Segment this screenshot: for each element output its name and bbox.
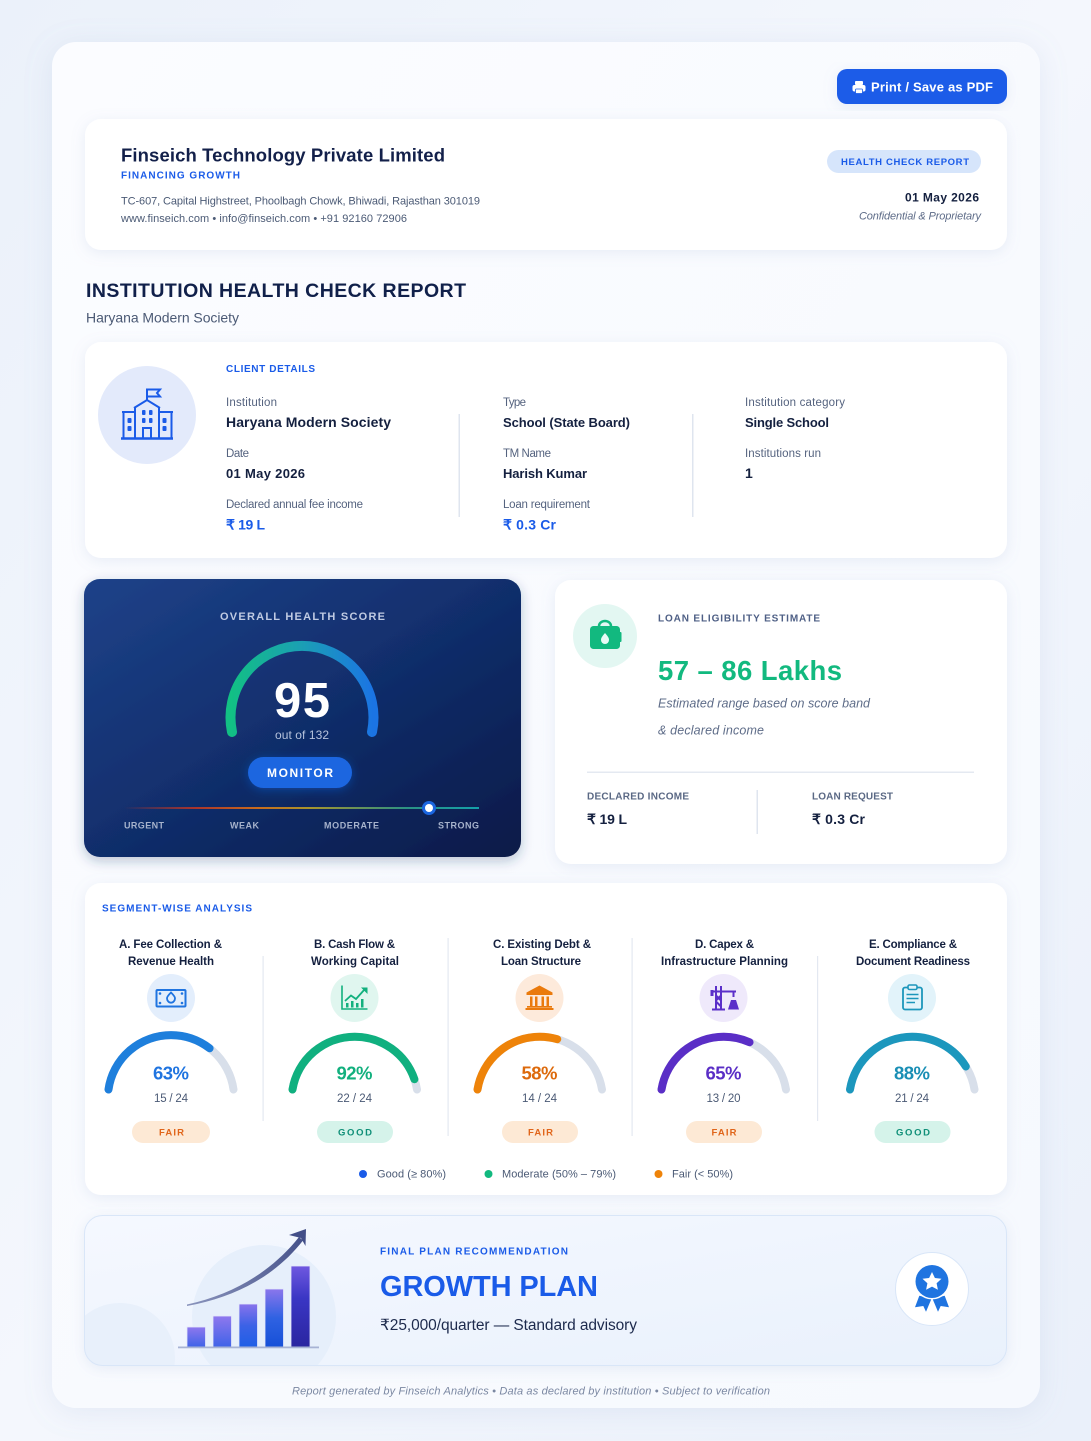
eligibility range: 57 – 86 Lakhs — [658, 655, 842, 686]
field: declared income: Declared annual fee income — [226, 499, 363, 511]
panel: segment-wise analysis — [85, 883, 1007, 1195]
segment B: cash flow: 22 / 24 — [337, 1093, 373, 1105]
field: institutions run: 1 — [745, 465, 753, 481]
segment C: existing debt: Loan Structure — [501, 956, 581, 968]
growth arrow — [187, 1229, 306, 1306]
band labels: STRONG — [438, 820, 479, 830]
field: date: 01 May 2026 — [226, 466, 305, 481]
field: loan requirement: ₹ 0.3 Cr — [503, 516, 557, 532]
segment B: cash flow — [292, 939, 417, 1143]
field: type: School (State Board) — [503, 415, 630, 430]
band labels: WEAK — [230, 820, 260, 830]
report date: 01 May 2026 — [905, 190, 979, 204]
status pill: good: GOOD — [338, 1128, 372, 1138]
icon: bank — [516, 974, 564, 1022]
eligibility heading: LOAN ELIGIBILITY ESTIMATE — [658, 614, 820, 624]
company address: TC-607, Capital Highstreet, Phoolbagh Chowk, Bhiwadi, Rajasthan 301019 — [121, 196, 480, 208]
segment B: cash flow: Working Capital — [311, 956, 399, 968]
badge: health check report: HEALTH CHECK REPORT — [841, 157, 969, 168]
panel: client details — [85, 342, 1007, 558]
panel: loan eligibility — [555, 580, 1007, 864]
company name: Finseich Technology Private Limited — [121, 144, 445, 166]
gauge 65% — [662, 1037, 786, 1090]
button label: Print / Save as PDF — [871, 80, 993, 94]
stat: declared income — [587, 792, 689, 827]
icon: clipboard — [888, 974, 936, 1022]
tagline: FINANCING GROWTH — [121, 170, 240, 182]
segment E: compliance: E. Compliance & — [869, 939, 957, 951]
status pill: monitor: MONITOR — [267, 766, 333, 780]
gauge 58% — [478, 1037, 602, 1090]
stat: loan request — [812, 792, 893, 827]
segment A: fee collection: 15 / 24 — [154, 1093, 189, 1105]
field: institutions run: Institutions run — [745, 448, 821, 460]
status pill: fair: FAIR — [712, 1128, 737, 1138]
field: declared income — [226, 499, 363, 532]
panel: final plan recommendation — [84, 1215, 1008, 1370]
field: date: Date — [226, 448, 249, 460]
subtitle: Haryana Modern Society — [86, 310, 239, 326]
legend: Good (≥ 80%) — [377, 1168, 446, 1180]
score gauge — [230, 646, 374, 732]
field: TM name: Harish Kumar — [503, 466, 587, 481]
eligibility note: Estimated range based on score band — [658, 696, 871, 710]
eligibility note — [658, 696, 871, 738]
segment D: capex: Infrastructure Planning — [661, 956, 788, 968]
segment E: compliance: Document Readiness — [856, 956, 970, 968]
status pill: fair: FAIR — [528, 1128, 553, 1138]
status pill: good — [317, 1121, 393, 1143]
icon: award badge — [896, 1252, 968, 1326]
band labels — [124, 820, 479, 830]
panel: company header — [85, 119, 1007, 250]
field: declared income: ₹ 19 L — [226, 516, 265, 532]
field: loan requirement: Loan requirement — [503, 499, 591, 511]
status pill: fair — [686, 1121, 762, 1143]
plan price: ₹25,000/quarter — Standard advisory — [380, 1317, 637, 1334]
field: institution — [226, 397, 391, 430]
segment C: existing debt: C. Existing Debt & — [493, 939, 591, 951]
icon: banknote — [147, 974, 195, 1022]
stat: loan request: ₹ 0.3 Cr — [812, 811, 866, 827]
status pill: good: GOOD — [896, 1128, 930, 1138]
field: institution category — [745, 397, 845, 430]
growth chart illustration — [178, 1229, 319, 1348]
segment D: capex: 65% — [706, 1062, 742, 1084]
eligibility note: & declared income — [658, 724, 764, 738]
field: institutions run — [745, 448, 821, 481]
status pill: good — [874, 1121, 950, 1143]
segment A: fee collection: 63% — [153, 1062, 189, 1084]
field: TM name: TM Name — [503, 448, 551, 460]
field: date — [226, 448, 305, 481]
section heading: SEGMENT-WISE ANALYSIS — [102, 904, 252, 914]
legend — [359, 1168, 733, 1180]
icon: crane — [700, 974, 748, 1022]
gauge 63% — [108, 1035, 234, 1090]
field: TM name — [503, 448, 587, 481]
segment C: existing debt: 14 / 24 — [522, 1093, 558, 1105]
segment D: capex: 13 / 20 — [706, 1093, 740, 1105]
plan heading: FINAL PLAN RECOMMENDATION — [380, 1246, 568, 1258]
main title: INSTITUTION HEALTH CHECK REPORT — [86, 280, 466, 302]
stat: declared income: DECLARED INCOME — [587, 792, 689, 802]
field: institution category: Single School — [745, 415, 829, 430]
icon: school building — [98, 366, 196, 464]
score heading: OVERALL HEALTH SCORE — [220, 611, 385, 623]
segment C: existing debt: 58% — [522, 1062, 558, 1084]
segment B: cash flow: 92% — [336, 1062, 372, 1084]
band labels: URGENT — [124, 820, 164, 830]
segment E: compliance: 88% — [894, 1062, 930, 1084]
field: loan requirement — [503, 499, 591, 532]
score band slider — [124, 801, 479, 815]
segment D: capex: D. Capex & — [695, 939, 754, 951]
badge: health check report — [827, 150, 981, 173]
section heading: CLIENT DETAILS — [226, 364, 315, 375]
plan name: GROWTH PLAN — [380, 1271, 598, 1303]
field: institution: Haryana Modern Society — [226, 414, 391, 430]
company contact: www.finseich.com • info@finseich.com • +91 92160 72906 — [120, 213, 407, 225]
gauge 88% — [850, 1037, 974, 1090]
field: type: Type — [503, 397, 526, 409]
legend: Moderate (50% – 79%) — [502, 1168, 616, 1180]
segment E: compliance: 21 / 24 — [895, 1093, 930, 1105]
status pill: fair — [132, 1121, 210, 1143]
score out of: out of 132 — [275, 728, 329, 742]
confidentiality note: Confidential & Proprietary — [859, 210, 982, 222]
field: institution category: Institution category — [745, 397, 845, 409]
legend: Fair (< 50%) — [672, 1168, 733, 1180]
footer note: Report generated by Finseich Analytics • Data as declared by institution • Subject to verification — [292, 1386, 770, 1398]
panel: overall health score — [84, 579, 521, 857]
segment A: fee collection: Revenue Health — [128, 956, 214, 968]
segment A: fee collection: A. Fee Collection & — [119, 939, 222, 951]
segment E: compliance — [850, 939, 974, 1143]
icon: money bag — [573, 604, 637, 668]
icon: growth chart — [330, 974, 378, 1022]
segment D: capex — [661, 939, 788, 1143]
segment A: fee collection — [108, 939, 234, 1143]
stat: declared income: ₹ 19 L — [587, 811, 627, 827]
button: print / save as PDF — [837, 69, 1007, 104]
field: institution: Institution — [226, 397, 277, 409]
gauge 92% — [292, 1037, 417, 1090]
status pill: fair: FAIR — [159, 1128, 184, 1138]
stat: loan request: LOAN REQUEST — [812, 792, 893, 802]
score value: 95 — [274, 674, 330, 728]
segment C: existing debt — [478, 939, 602, 1143]
status pill: fair — [502, 1121, 578, 1143]
icon: printer — [852, 81, 866, 94]
band labels: MODERATE — [324, 820, 379, 830]
status pill: monitor — [248, 757, 352, 788]
segment B: cash flow: B. Cash Flow & — [314, 939, 395, 951]
field: type — [503, 397, 630, 430]
